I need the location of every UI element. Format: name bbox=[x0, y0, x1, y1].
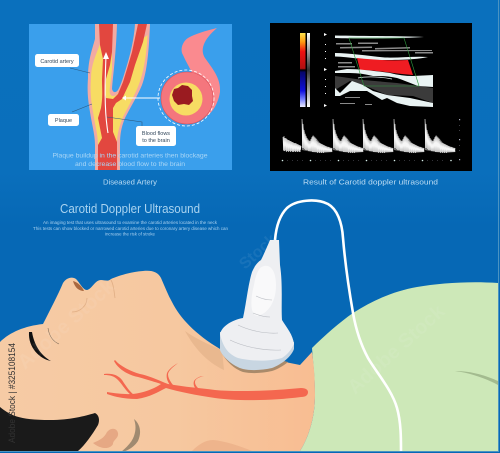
label: plaque bbox=[48, 114, 79, 126]
caption: doppler result: Result of Carotid doppler ultrasound bbox=[303, 178, 438, 186]
lumen bbox=[98, 24, 147, 170]
time axis bbox=[282, 119, 460, 161]
watermark: Adobe Stock bbox=[14, 275, 120, 374]
sample box bbox=[349, 38, 419, 86]
lower vessel wall bbox=[335, 69, 433, 87]
pointer arrow bbox=[122, 96, 160, 100]
artery wall bbox=[88, 24, 150, 170]
probe shadow bbox=[221, 350, 288, 373]
speckle bbox=[336, 42, 433, 105]
carotid artery bbox=[104, 360, 308, 400]
spectral waveform bbox=[283, 119, 456, 153]
shoulder shadow bbox=[192, 440, 252, 451]
tissue shading bbox=[335, 76, 433, 103]
artery cross-section bbox=[158, 28, 220, 126]
caption: diseased artery: Diseased Artery bbox=[103, 178, 157, 186]
ultrasound probe bbox=[220, 240, 294, 373]
patient gown bbox=[300, 282, 498, 451]
nose crease bbox=[72, 280, 115, 312]
colour flow bbox=[357, 58, 413, 75]
label: blood flows bbox=[136, 126, 176, 146]
description: increase the risk of stroke bbox=[105, 232, 155, 236]
nostril bbox=[73, 281, 84, 291]
b-mode image bbox=[335, 36, 433, 107]
depth scale bbox=[324, 33, 327, 107]
upper vessel wall bbox=[335, 53, 428, 60]
colour scale bbox=[300, 33, 310, 107]
jaw shadow bbox=[185, 331, 224, 370]
panel note: Plaque buildup in the carotid arteries then blockage bbox=[52, 152, 208, 160]
watermark bbox=[14, 231, 450, 399]
ear bbox=[93, 429, 118, 448]
gown crease bbox=[455, 371, 498, 385]
probe base bbox=[220, 332, 294, 370]
label: carotid artery: Carotid artery bbox=[40, 59, 74, 65]
ultrasound cable bbox=[275, 201, 401, 451]
ear fold bbox=[121, 419, 140, 452]
plaque bbox=[91, 35, 148, 150]
probe ridges bbox=[230, 296, 281, 350]
probe head bbox=[220, 240, 294, 361]
title: Carotid Doppler Ultrasound bbox=[60, 202, 200, 216]
label: carotid artery bbox=[35, 54, 79, 67]
stock id: Adobe Stock | #325108154 bbox=[7, 343, 17, 443]
top strip bbox=[335, 36, 424, 39]
hair bbox=[0, 407, 99, 451]
panel note: and decrease blood flow to the brain bbox=[75, 161, 185, 168]
description: This tests can show blocked or narrowed carotid arteries due to coronary artery disease which can bbox=[33, 226, 228, 231]
label: blood flows: Blood flows bbox=[142, 131, 170, 137]
leader lines bbox=[70, 68, 142, 126]
panel note bbox=[52, 152, 208, 168]
description bbox=[33, 220, 228, 236]
label: blood flows: to the brain bbox=[142, 138, 170, 144]
eyelid bbox=[29, 332, 51, 361]
far wall bbox=[335, 81, 433, 107]
label: plaque: Plaque bbox=[55, 118, 72, 124]
panel: doppler result bbox=[270, 23, 472, 171]
description: An imaging test that uses ultrasound to examine the carotid arteries located in the neck bbox=[43, 220, 218, 225]
panel: diseased artery bbox=[29, 24, 232, 170]
flow arrow bbox=[103, 52, 109, 133]
watermark: Adobe Stock bbox=[344, 300, 450, 399]
thin echo lines bbox=[358, 77, 392, 79]
watermark: Stock bbox=[236, 231, 280, 273]
eyebrow bbox=[48, 328, 59, 344]
probe highlight bbox=[251, 266, 276, 316]
patient head and neck bbox=[0, 271, 315, 452]
